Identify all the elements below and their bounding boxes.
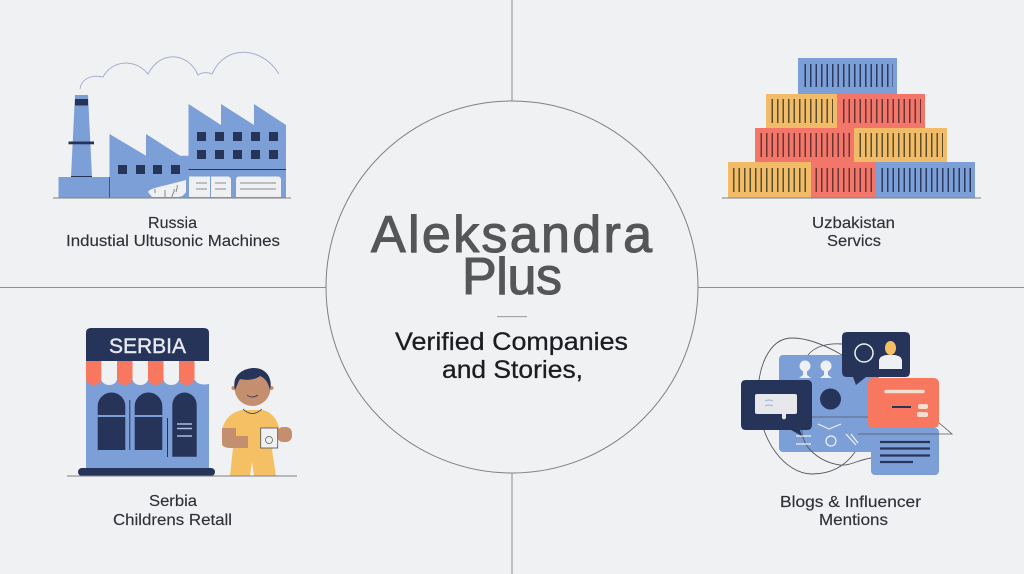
center circle xyxy=(326,101,698,473)
label: Serbia xyxy=(113,493,232,529)
title: Aleksandra xyxy=(371,206,652,264)
label: Blogs xyxy=(780,494,922,529)
panel: Blogs xyxy=(741,332,952,529)
panel: Serbia xyxy=(67,328,297,529)
panel: Uzbakistan xyxy=(722,58,981,250)
label: Blogs: Blogs & Influencer xyxy=(780,494,922,511)
subtitle: Verified Companies xyxy=(395,328,628,356)
label: Serbia: Childrens Retall xyxy=(113,512,232,529)
icon: storefront xyxy=(78,328,215,476)
subtitle xyxy=(395,328,628,384)
title: Plus xyxy=(462,248,562,306)
label: Uzbakistan: Uzbakistan xyxy=(812,215,895,232)
icon: storefront: SERBIA xyxy=(109,335,186,358)
label: Serbia: Serbia xyxy=(149,493,197,510)
icon: shopkeeper xyxy=(67,368,297,476)
icon: social media bubbles xyxy=(741,332,952,475)
title xyxy=(371,206,652,306)
label: Russia xyxy=(66,215,280,250)
label: Uzbakistan: Servics xyxy=(827,233,881,250)
label: Russia: Russia xyxy=(148,215,197,232)
panel: Russia xyxy=(53,52,291,250)
icon: shipping containers xyxy=(722,58,981,198)
label: Uzbakistan xyxy=(812,215,895,250)
subtitle: and Stories, xyxy=(442,356,583,384)
label: Blogs: Mentions xyxy=(819,512,888,529)
label: Russia: Industial Ultusonic Machines xyxy=(66,233,280,250)
icon: factory xyxy=(53,52,291,198)
